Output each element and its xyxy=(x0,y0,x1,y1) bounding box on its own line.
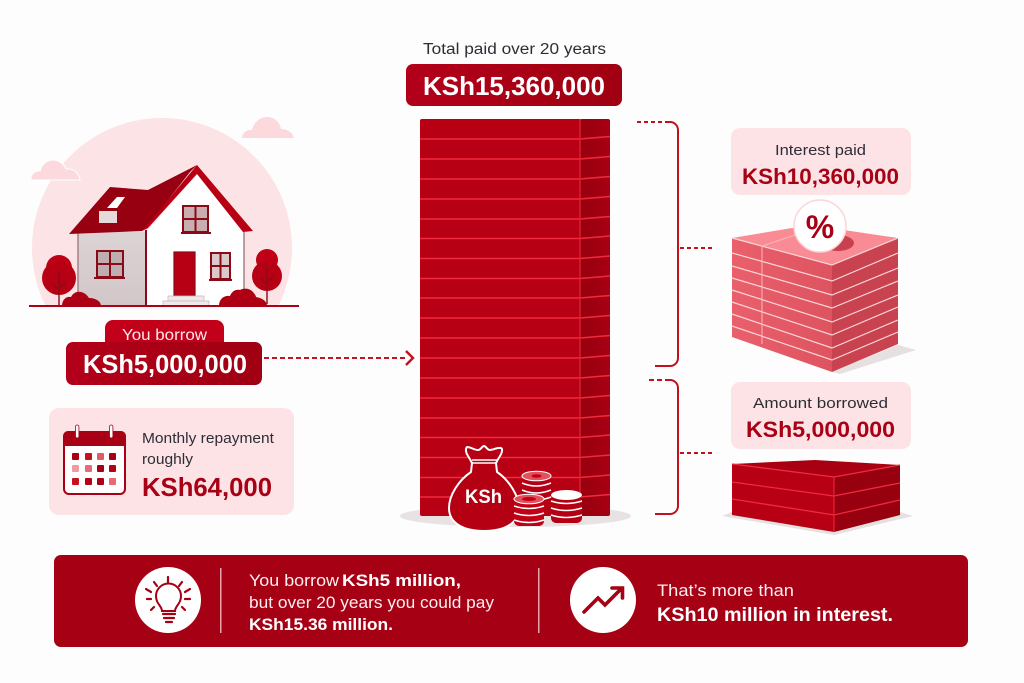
floor shadow xyxy=(400,505,631,527)
door xyxy=(174,252,195,296)
total cost stack xyxy=(420,119,610,516)
front coin stack xyxy=(514,494,544,526)
dashed arrow to stack xyxy=(264,351,413,365)
skylight and dormer xyxy=(99,197,125,223)
total heading: Total paid over 20 years xyxy=(423,41,606,58)
panel: amount borrowed xyxy=(731,382,911,449)
bushes xyxy=(62,289,267,306)
right coin stack xyxy=(551,490,582,523)
you borrow tag: You borrow xyxy=(122,327,208,344)
bracket: amount borrowed xyxy=(649,380,712,514)
borrowed amount pill: KSh5,000,000 xyxy=(83,351,247,379)
bracket: interest xyxy=(637,122,712,366)
percent badge xyxy=(794,200,846,252)
main house wall xyxy=(146,174,244,306)
panel: amount borrowed: KSh5,000,000 xyxy=(746,417,895,442)
icon: coin stacks xyxy=(514,471,582,526)
borrowed amount pill xyxy=(66,342,262,385)
summary text: borrow versus total: You borrow xyxy=(249,572,339,590)
summary text: borrow versus total: KSh15.36 million. xyxy=(249,616,393,634)
house illustration xyxy=(29,117,299,307)
background circle xyxy=(32,118,292,305)
summary text: borrow versus total: but over 20 years you could pay xyxy=(249,594,495,612)
right tree xyxy=(252,249,282,304)
cloud right xyxy=(242,117,294,138)
summary text: borrow versus total: KSh5 million, xyxy=(342,572,461,590)
borrowed stack xyxy=(722,460,913,535)
you borrow tag xyxy=(105,320,224,350)
left window xyxy=(94,251,125,278)
total amount pill xyxy=(406,64,622,106)
panel: monthly repayment xyxy=(49,408,294,515)
monthly repayment amount: KSh64,000 xyxy=(142,474,272,502)
panel: interest paid: Interest paid xyxy=(775,142,866,159)
roof xyxy=(69,165,197,234)
back coin stack xyxy=(522,471,551,514)
total amount pill: KSh15,360,000 xyxy=(423,71,605,101)
panel: interest paid: KSh10,360,000 xyxy=(742,164,899,189)
summary text: interest: KSh10 million in interest. xyxy=(657,604,893,626)
icon: money bag: KSh xyxy=(465,487,502,508)
steps xyxy=(163,296,209,306)
bottom summary band xyxy=(54,555,968,647)
upper window xyxy=(181,206,211,233)
summary text: interest xyxy=(657,581,893,626)
cloud left xyxy=(31,160,80,180)
icon: rising arrow xyxy=(570,567,636,633)
divider left xyxy=(220,568,222,633)
right window xyxy=(209,253,232,280)
monthly repayment label: Monthly repayment xyxy=(142,431,274,447)
panel: interest paid xyxy=(731,128,911,195)
panel: amount borrowed: Amount borrowed xyxy=(753,395,888,412)
divider right xyxy=(538,568,540,633)
summary text: interest: That’s more than xyxy=(657,581,794,600)
percent badge: % xyxy=(806,209,834,245)
ground line xyxy=(29,305,299,307)
monthly repayment label xyxy=(142,431,274,468)
icon: money bag xyxy=(449,446,519,531)
left house wing xyxy=(78,232,147,306)
icon: calendar xyxy=(63,425,126,494)
left tree xyxy=(42,255,76,306)
icon: lightbulb xyxy=(135,567,201,633)
interest stack xyxy=(732,200,916,374)
summary text: borrow versus total xyxy=(249,572,495,634)
monthly repayment label: roughly xyxy=(142,452,194,468)
